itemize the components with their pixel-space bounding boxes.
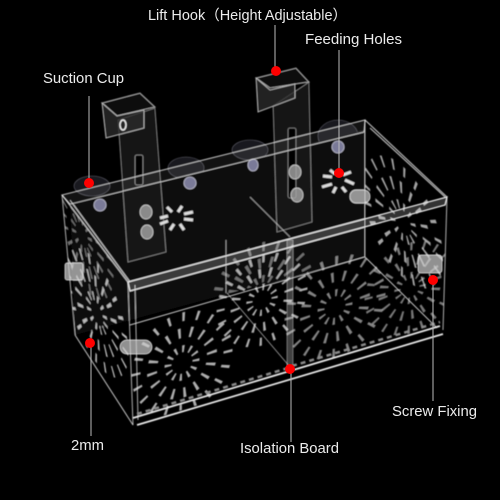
- callout: lift hook: [148, 7, 347, 76]
- callout: suction cup: [43, 71, 124, 188]
- box frame edges: [62, 120, 447, 425]
- feeding hole stars: [160, 170, 354, 230]
- back wall hole burst: [213, 240, 312, 294]
- callout: screw fixing: Screw Fixing: [392, 404, 477, 420]
- callout: feeding holes: Feeding Holes: [305, 32, 402, 48]
- callout: 2mm: [71, 338, 104, 454]
- adjustment screws on hooks: [140, 165, 303, 239]
- suction cups behind back wall: [74, 120, 358, 196]
- right lift hook: [256, 68, 312, 232]
- vertical corners: [62, 120, 447, 425]
- bottom edges: [75, 257, 437, 425]
- left lift hook: [102, 93, 166, 262]
- center isolation board: [226, 197, 290, 367]
- front top rim band: [128, 197, 447, 291]
- callout: 2mm: 2mm: [71, 438, 104, 454]
- callout: isolation board: [240, 364, 339, 457]
- acrylic corner clips and screws: [65, 190, 442, 354]
- callout: screw fixing: [392, 275, 477, 420]
- front wall holes: [136, 235, 451, 422]
- left and right top edges: [62, 120, 447, 282]
- back top rim band: [62, 120, 365, 204]
- callout: isolation board: Isolation Board: [240, 441, 339, 457]
- callout: feeding holes: [305, 32, 402, 178]
- acrylic box product photo: [53, 68, 451, 425]
- right side wall holes: [364, 154, 444, 290]
- suction cup knobs: [94, 141, 344, 211]
- infographic canvas: [44, 8, 476, 453]
- left side wall holes: [62, 198, 129, 378]
- callout: lift hook: Lift Hook（Height Adjustable）: [148, 7, 347, 24]
- back wall: [70, 130, 365, 335]
- callout: suction cup: Suction Cup: [43, 71, 124, 87]
- bottom gap band: [137, 368, 288, 414]
